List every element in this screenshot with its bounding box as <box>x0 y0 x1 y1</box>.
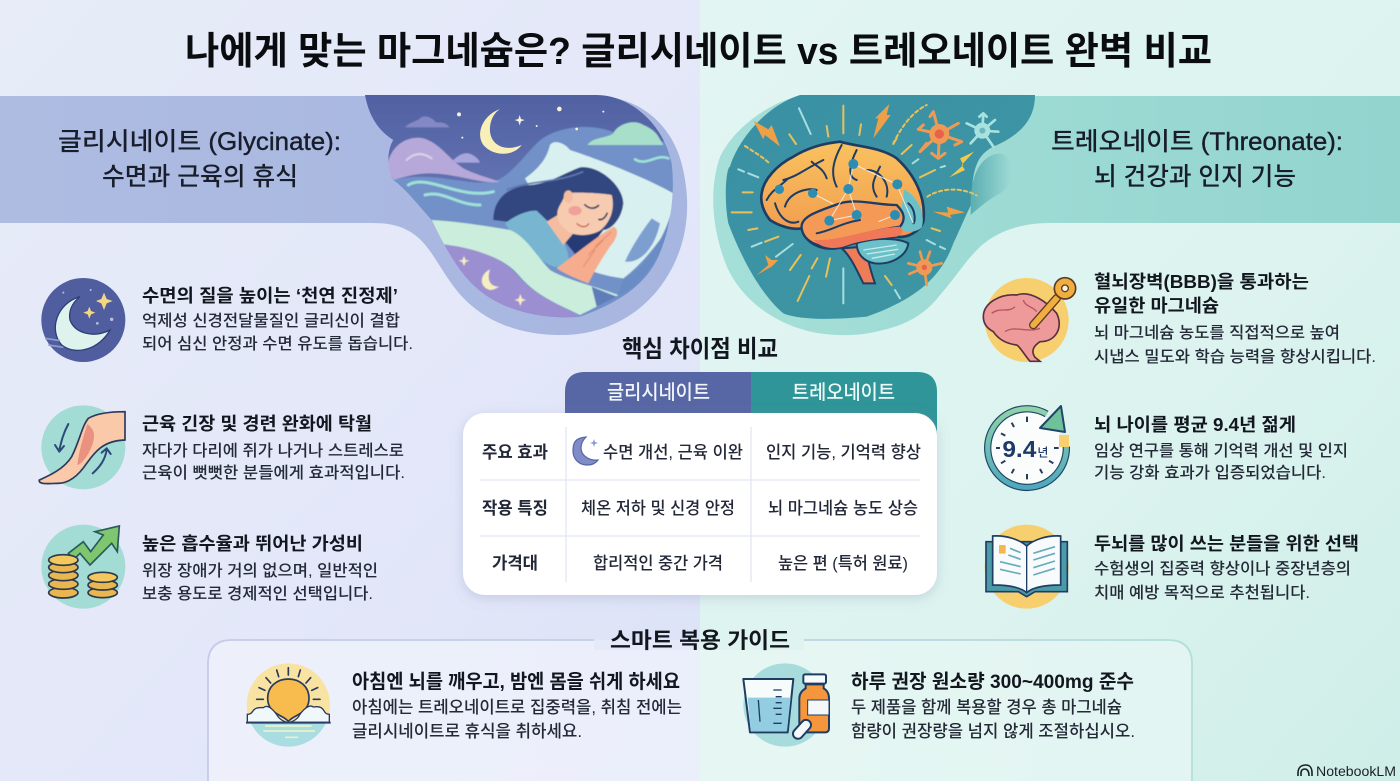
icon: clock 9.4 years <box>988 406 1069 487</box>
guide: morning and night: 아침엔 뇌를 깨우고, 밤엔 몸을 쉬게 하세요 <box>352 671 680 693</box>
row: action <box>482 499 918 518</box>
illustration: sleeping woman <box>365 95 673 318</box>
heading: glycinate: 글리시네이트 (Glycinate): <box>58 128 341 156</box>
table header: glycinate: 글리시네이트 <box>607 381 710 404</box>
benefit: muscle relaxation <box>39 405 405 489</box>
benefit: crosses BBB: 뇌 마그네슘 농도를 직접적으로 높여 <box>1094 324 1340 342</box>
logo: NotebookLM: NotebookLM <box>1316 764 1396 779</box>
panel: threonate benefits <box>983 272 1376 609</box>
benefit: muscle relaxation: 자다가 다리에 쥐가 나거나 스트레스로 <box>142 442 404 460</box>
icon: clock 9.4 years: 년 <box>1037 445 1048 459</box>
benefit: heavy brain users: 치매 예방 목적으로 추천됩니다. <box>1094 584 1310 602</box>
heading: key differences: 핵심 차이점 비교 <box>622 336 778 363</box>
heading: glycinate <box>58 128 341 191</box>
panel: glycinate benefits <box>39 278 413 609</box>
benefit: natural sedative <box>41 278 413 362</box>
title: 나에게 맞는 마그네슘은? 글리시네이트 vs 트레오네이트 완벽 비교 <box>185 31 1212 73</box>
guide: morning and night: 글리시네이트로 휴식을 취하세요. <box>352 722 582 741</box>
icon: leg with arrows <box>39 405 125 489</box>
row: price: 합리적인 중간 가격 <box>593 554 723 573</box>
icon: rising sun <box>245 662 332 748</box>
icon: brain and key <box>983 278 1076 362</box>
benefit: natural sedative: 억제성 신경전달물질인 글리신이 결합 <box>142 312 400 330</box>
guide: daily dose: 하루 권장 원소량 300~400mg 준수 <box>851 671 1134 693</box>
table header: threonate: 트레오네이트 <box>792 381 895 404</box>
benefit: absorption and value <box>41 525 378 609</box>
benefit: younger brain age: 기능 강화 효과가 입증되었습니다. <box>1094 464 1326 482</box>
benefit: crosses BBB <box>983 272 1376 366</box>
benefit: natural sedative: 수면의 질을 높이는 ‘천연 진정제’ <box>142 286 398 306</box>
benefit: muscle relaxation: 근육이 뻣뻣한 분들에게 효과적입니다. <box>142 464 405 482</box>
benefit: younger brain age: 뇌 나이를 평균 9.4년 젊게 <box>1094 415 1296 435</box>
row: action: 뇌 마그네슘 농도 상승 <box>768 499 918 518</box>
icon: crescent moon <box>41 278 125 362</box>
guide: morning and night: 아침에는 트레오네이트로 집중력을, 취침 전에는 <box>352 698 682 717</box>
table header: glycinate <box>565 372 751 430</box>
benefit: heavy brain users: 수험생의 집중력 향상이나 중장년층의 <box>1094 560 1351 578</box>
row: price <box>492 554 908 573</box>
heading: threonate <box>1051 128 1343 191</box>
benefit: natural sedative: 되어 심신 안정과 수면 유도를 돕습니다. <box>142 335 413 353</box>
benefit: muscle relaxation: 근육 긴장 및 경련 완화에 탁월 <box>142 414 372 434</box>
benefit: crosses BBB: 혈뇌장벽(BBB)을 통과하는 <box>1094 272 1309 292</box>
benefit: younger brain age <box>988 406 1348 487</box>
benefit: absorption and value: 높은 흡수율과 뛰어난 가성비 <box>142 534 363 554</box>
guide: morning and night <box>245 662 682 748</box>
benefit: heavy brain users: 두뇌를 많이 쓰는 분들을 위한 선택 <box>1094 534 1359 554</box>
benefit: absorption and value: 위장 장애가 거의 없으며, 일반적인 <box>142 562 378 580</box>
row: main effect <box>482 437 921 465</box>
panel: smart dosing guide <box>208 628 1192 781</box>
heading: glycinate: 수면과 근육의 휴식 <box>102 163 298 191</box>
row: price: 높은 편 (특허 원료) <box>778 554 908 573</box>
row: main effect: 주요 효과 <box>482 443 548 462</box>
row: action: 작용 특징 <box>482 499 548 518</box>
icon: clock 9.4 years: 9.4 <box>1002 436 1036 462</box>
row: price: 가격대 <box>492 554 538 573</box>
panel: threonate header <box>713 95 1400 335</box>
icon: small moon <box>573 437 598 465</box>
table header: threonate <box>751 372 937 440</box>
panel: glycinate header <box>0 90 700 340</box>
row: action: 체온 저하 및 신경 안정 <box>581 499 735 518</box>
guide: daily dose: 두 제품을 함께 복용할 경우 총 마그네슘 <box>851 698 1122 717</box>
heading: threonate: 뇌 건강과 인지 기능 <box>1094 163 1296 191</box>
benefit: absorption and value: 보충 용도로 경제적인 선택입니다. <box>142 585 373 603</box>
benefit: younger brain age: 임상 연구를 통해 기억력 개선 및 인지 <box>1094 442 1348 460</box>
benefit: crosses BBB: 시냅스 밀도와 학습 능력을 향상시킵니다. <box>1094 348 1376 366</box>
benefit: heavy brain users <box>985 525 1359 609</box>
table card <box>463 413 937 595</box>
row: main effect: 수면 개선, 근육 이완 <box>603 443 743 462</box>
row: main effect: 인지 기능, 기억력 향상 <box>766 443 921 462</box>
heading: guide: 스마트 복용 가이드 <box>610 628 790 653</box>
icon: beaker, bottle and pill <box>743 663 829 747</box>
icon: coins and rising arrow <box>41 525 125 609</box>
icon: open book <box>985 525 1069 609</box>
benefit: crosses BBB: 유일한 마그네슘 <box>1094 296 1219 316</box>
guide: daily dose <box>743 663 1135 747</box>
panel: comparison table <box>463 336 937 595</box>
guide: daily dose: 함량이 권장량을 넘지 않게 조절하십시오. <box>851 722 1135 741</box>
illustration: brain with neurons <box>726 95 1035 319</box>
heading: threonate: 트레오네이트 (Threonate): <box>1051 128 1343 156</box>
